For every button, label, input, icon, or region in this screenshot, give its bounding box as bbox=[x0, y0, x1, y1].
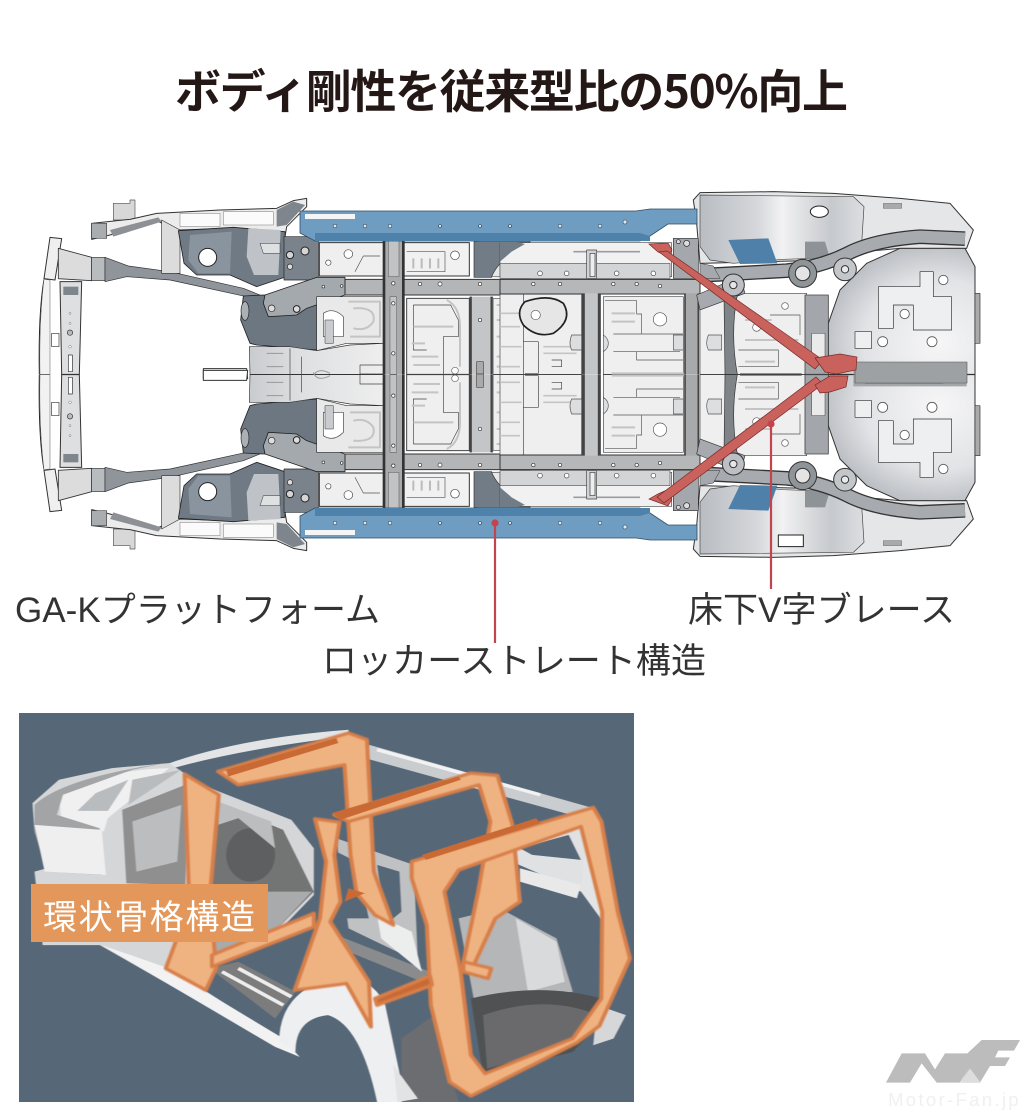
V-shaped underfloor brace bbox=[649, 243, 857, 506]
frame ring 2 upper bbox=[334, 773, 520, 967]
rear structure and spare wheel well bbox=[500, 192, 980, 557]
white body structure bbox=[32, 730, 626, 1102]
front ring bbox=[412, 807, 630, 1096]
chassis diagram: GA-K platform underbody bbox=[39, 192, 980, 557]
label: annular frame structure: 環状骨格構造 bbox=[43, 899, 255, 937]
watermark logo bbox=[886, 1040, 1020, 1110]
panel: annular frame structure body bbox=[19, 713, 634, 1102]
title: ボディ剛性を従来型比の50%向上 bbox=[175, 56, 848, 122]
asymmetric floor details bbox=[520, 206, 828, 547]
callout line: straight rocker bbox=[491, 519, 499, 643]
label: GA-K platform: GA-Kプラットフォーム bbox=[15, 591, 380, 630]
body shell illustration bbox=[32, 730, 633, 1102]
label: annular frame structure bbox=[31, 884, 268, 942]
centre pillar bbox=[295, 819, 371, 1027]
orange annular frames bbox=[166, 733, 630, 1096]
label: V brace: 床下V字ブレース bbox=[688, 591, 955, 630]
callout line: V brace bbox=[767, 420, 775, 589]
rear centre beam bbox=[855, 362, 967, 383]
panel background bbox=[19, 713, 634, 1102]
label: straight rocker: ロッカーストレート構造 bbox=[322, 642, 706, 681]
lower tie bbox=[375, 976, 432, 1005]
frame ring 3 bbox=[218, 733, 393, 925]
watermark text: Motor-Fan.jp bbox=[888, 1089, 1019, 1110]
rear pillar bbox=[166, 774, 219, 990]
blue rocker rails, straight side sills bbox=[300, 209, 697, 540]
front structure bbox=[39, 198, 530, 551]
lower beam bbox=[212, 913, 314, 967]
